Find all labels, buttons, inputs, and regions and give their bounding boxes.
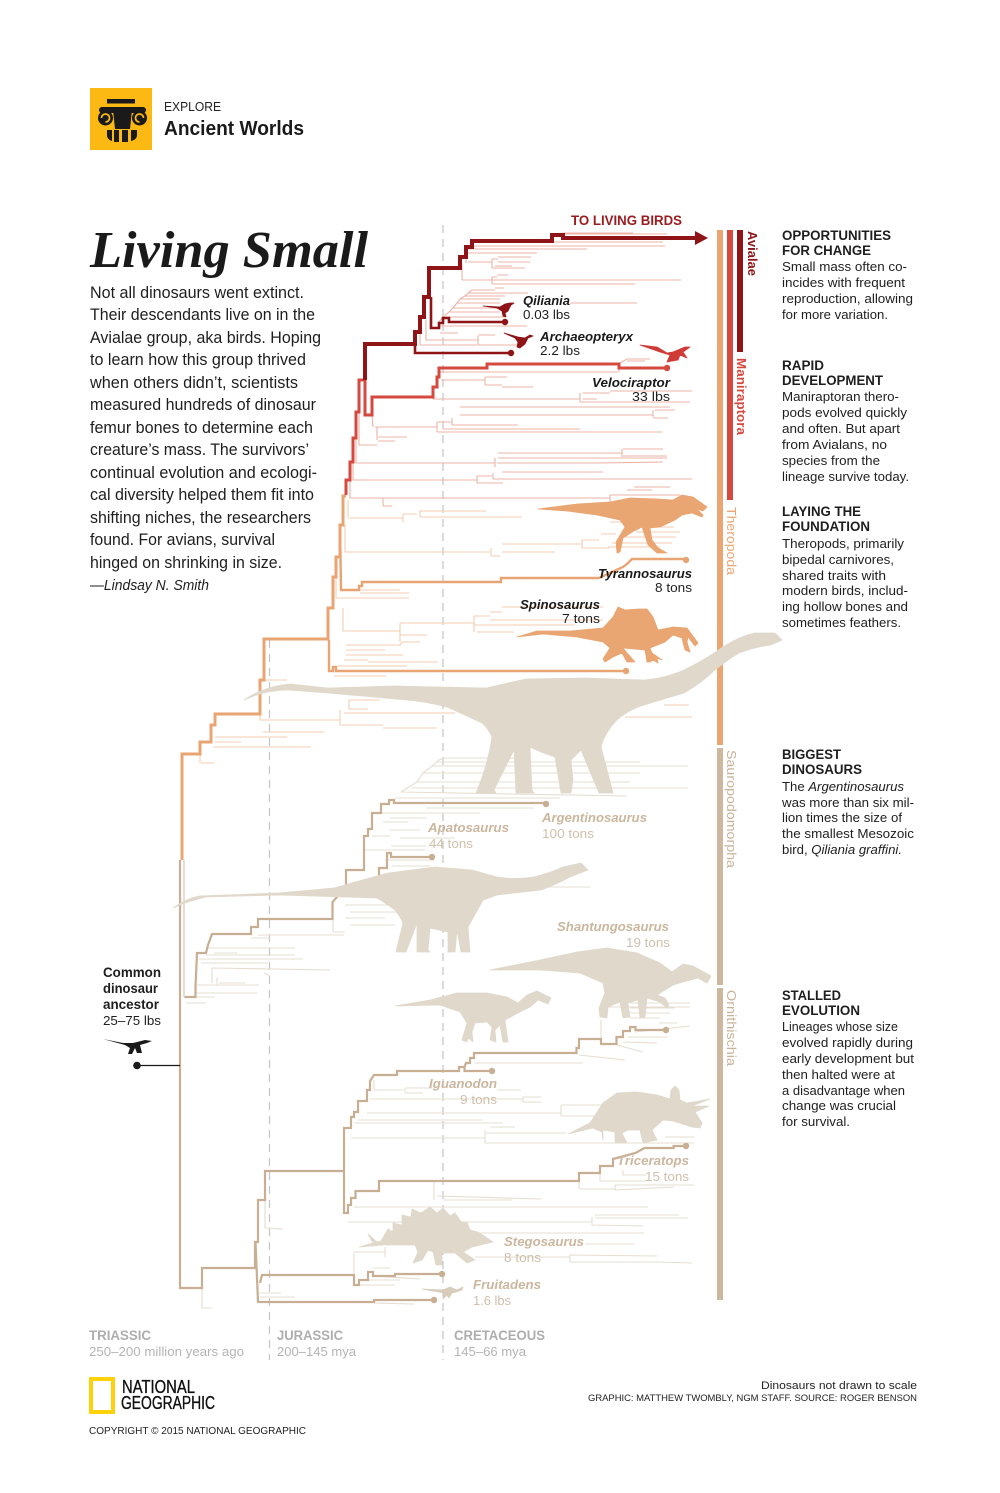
annotation: stalled evolution: evolved rapidly during — [782, 1035, 913, 1050]
lineage end dots — [429, 319, 689, 1303]
credits — [588, 1380, 917, 1404]
species labels: tan section: 9 tons — [460, 1092, 498, 1107]
intro text block: cal diversity helped them fit into — [90, 486, 314, 504]
silhouette: Shantungosaurus — [490, 948, 711, 1018]
callout: common dinosaur ancestor: 25–75 lbs — [103, 1013, 162, 1028]
period labels: 250–200 million years ago — [89, 1344, 244, 1359]
annotation: rapid development — [782, 358, 909, 484]
species labels: coloured section: Velociraptor — [592, 375, 671, 390]
intro text block: when others didn’t, scientists — [89, 374, 298, 392]
annotation: opportunities for change: incides with frequent — [782, 275, 905, 290]
intro text block: measured hundreds of dinosaur — [90, 396, 316, 414]
annotation: stalled evolution: EVOLUTION — [782, 1003, 860, 1018]
annotation: stalled evolution: then halted were at — [782, 1067, 895, 1082]
period dividers — [270, 225, 443, 1360]
annotation: stalled evolution: Lineages whose size — [782, 1019, 898, 1034]
sauropodomorph lineages — [184, 800, 545, 997]
maniraptoran lineages — [346, 364, 665, 495]
period labels: TRIASSIC — [89, 1328, 151, 1343]
species labels: tan section: Apatosaurus — [427, 820, 509, 835]
annotation: laying the foundation — [782, 504, 908, 630]
silhouette: Tyrannosaurus — [538, 495, 707, 553]
species labels: tan section: 19 tons — [626, 935, 671, 950]
clade bars and labels: Maniraptora — [734, 358, 749, 436]
silhouette: Stegosaurus — [359, 1207, 493, 1265]
species labels: tan section: 8 tons — [504, 1250, 542, 1265]
annotation: stalled evolution — [782, 988, 914, 1129]
annotation: opportunities for change: OPPORTUNITIES — [782, 228, 891, 243]
annotation: opportunities for change — [782, 228, 913, 322]
ornithischian lineages — [180, 860, 686, 1302]
annotation: opportunities for change: FOR CHANGE — [782, 243, 871, 258]
title: Living Small — [89, 222, 369, 279]
species labels: coloured section: 0.03 lbs — [523, 307, 571, 322]
clade bars and labels: Sauropodomorpha — [724, 750, 739, 869]
intro text block: Their descendants live on in the — [90, 306, 315, 324]
annotation: biggest dinosaurs: bird, Qiliania graffini. — [782, 842, 902, 857]
species labels: coloured section: 33 lbs — [632, 389, 671, 404]
silhouette: Archaeopteryx — [504, 333, 533, 348]
species labels: coloured section — [520, 293, 693, 626]
National Geographic logo: GEOGRAPHIC — [121, 1393, 215, 1413]
silhouette: Qiliania — [483, 303, 514, 317]
annotation: rapid development: pods evolved quickly — [782, 405, 908, 420]
intro text block: continual evolution and ecologi- — [90, 464, 317, 482]
copyright: COPYRIGHT © 2015 NATIONAL GEOGRAPHIC — [89, 1425, 306, 1437]
annotation: laying the foundation: FOUNDATION — [782, 519, 870, 534]
annotation: biggest dinosaurs: the smallest Mesozoic — [782, 826, 915, 841]
intro text block: Avialae group, aka birds. Hoping — [90, 329, 321, 347]
annotation: stalled evolution: for survival. — [782, 1114, 850, 1129]
intro text block — [89, 284, 321, 594]
National Geographic logo — [91, 1377, 215, 1413]
annotation: opportunities for change: reproduction, allowing — [782, 291, 913, 306]
label: to living birds: TO LIVING BIRDS — [571, 213, 682, 228]
light ornithischian branches — [202, 1003, 694, 1308]
annotation: opportunities for change: for more variation. — [782, 307, 888, 322]
intro text block: —Lindsay N. Smith — [89, 578, 209, 594]
species labels: coloured section: Spinosaurus — [520, 597, 600, 612]
intro text block: shifting niches, the researchers — [90, 509, 311, 527]
series badge: Explore Ancient Worlds: EXPLORE — [164, 100, 221, 114]
silhouette: Fruitadens — [422, 1287, 463, 1299]
National Geographic logo: NATIONAL — [122, 1377, 195, 1397]
species labels: tan section: 15 tons — [645, 1169, 690, 1184]
annotation: stalled evolution: a disadvantage when — [782, 1083, 905, 1098]
phylogenetic tree: bold lineages — [180, 235, 697, 1302]
annotation: rapid development: Maniraptoran thero- — [782, 389, 899, 404]
annotation: rapid development: and often. But apart — [782, 421, 900, 436]
callout: common dinosaur ancestor — [103, 965, 180, 1069]
period labels: 145–66 mya — [454, 1344, 527, 1359]
light sauropod branches — [186, 758, 688, 1003]
callout: common dinosaur ancestor: Common — [103, 965, 161, 980]
species labels: tan section — [427, 810, 690, 1308]
annotation: biggest dinosaurs: The Argentinosaurus — [782, 779, 905, 794]
callout: common dinosaur ancestor: ancestor — [103, 997, 160, 1012]
series badge: Explore Ancient Worlds: Ancient Worlds — [164, 118, 304, 140]
annotation: stalled evolution: early development but — [782, 1051, 914, 1066]
annotation: rapid development: from Avialans, no — [782, 437, 887, 452]
annotation: opportunities for change: Small mass often co- — [782, 259, 907, 274]
intro text block: hinged on shrinking in size. — [90, 554, 282, 572]
annotation: biggest dinosaurs: BIGGEST — [782, 747, 842, 762]
credits: GRAPHIC: MATTHEW TWOMBLY, NGM STAFF. SOURCE: ROGER BENSON — [588, 1393, 917, 1404]
clade bars and labels: Ornithischia — [724, 990, 739, 1067]
annotation: laying the foundation: ing hollow bones and — [782, 599, 908, 614]
annotation: rapid development: RAPID — [782, 358, 824, 373]
species labels: tan section: Triceratops — [617, 1153, 689, 1168]
annotation: laying the foundation: bipedal carnivores, — [782, 552, 894, 567]
clade bars and labels: Avialae — [745, 231, 760, 276]
period labels: JURASSIC — [277, 1328, 343, 1343]
species labels: tan section: Argentinosaurus — [541, 810, 647, 825]
light avialae and maniraptoran branches — [350, 233, 692, 506]
annotation: stalled evolution: change was crucial — [782, 1098, 896, 1113]
annotation: laying the foundation: LAYING THE — [782, 504, 861, 519]
annotation: biggest dinosaurs: DINOSAURS — [782, 762, 862, 777]
annotation: laying the foundation: Theropods, primarily — [782, 536, 904, 551]
species labels: coloured section: Tyrannosaurus — [598, 566, 692, 581]
phylogenetic tree: light branches — [186, 233, 694, 1308]
series badge: Explore Ancient Worlds — [90, 88, 304, 150]
species labels: tan section: Shantungosaurus — [557, 919, 669, 934]
credits: Dinosaurs not drawn to scale — [761, 1380, 917, 1392]
species labels: tan section: Iguanodon — [429, 1076, 497, 1091]
silhouette: Iguanodon — [395, 991, 551, 1042]
silhouette: Spinosaurus — [517, 607, 698, 663]
annotation: rapid development: lineage survive today. — [782, 469, 909, 484]
intro text block: to learn how this group thrived — [90, 351, 306, 369]
species labels: tan section: Fruitadens — [473, 1277, 541, 1292]
intro text block: found. For avians, survival — [90, 531, 275, 549]
light theropod branches — [200, 500, 692, 763]
annotation: biggest dinosaurs — [781, 747, 915, 857]
callout: common dinosaur ancestor: dinosaur — [103, 981, 159, 996]
period labels — [89, 1328, 545, 1359]
annotation: laying the foundation: sometimes feathers. — [782, 615, 901, 630]
silhouette: Triceratops — [568, 1086, 710, 1143]
intro text block: Not all dinosaurs went extinct. — [90, 284, 304, 302]
clade bars and labels — [717, 230, 760, 1300]
silhouette: Apatosaurus — [173, 863, 588, 952]
species labels: tan section: 1.6 lbs — [473, 1293, 511, 1308]
clade bars and labels: Theropoda — [724, 507, 739, 576]
intro text block: femur bones to determine each — [90, 419, 313, 437]
species labels: tan section: Stegosaurus — [504, 1234, 584, 1249]
period labels: 200–145 mya — [277, 1344, 357, 1359]
species labels: coloured section: Qiliania — [523, 293, 570, 308]
species labels: coloured section: Archaeopteryx — [539, 329, 634, 344]
species labels: tan section: 44 tons — [429, 836, 474, 851]
theropod lineages — [182, 496, 346, 860]
period labels: CRETACEOUS — [454, 1328, 545, 1343]
avialan lineages — [365, 235, 697, 380]
species labels: tan section: 100 tons — [542, 826, 595, 841]
annotation: biggest dinosaurs: lion times the size of — [782, 810, 902, 825]
annotation: laying the foundation: shared traits with — [782, 568, 886, 583]
annotation: laying the foundation: modern birds, includ- — [782, 583, 908, 598]
species labels: coloured section: 8 tons — [655, 580, 693, 595]
annotation: biggest dinosaurs: was more than six mil- — [781, 795, 914, 810]
annotation: rapid development: DEVELOPMENT — [782, 373, 884, 388]
silhouette: Velociraptor — [640, 345, 690, 362]
annotation: rapid development: species from the — [782, 453, 880, 468]
intro text block: creature’s mass. The survivors’ — [90, 441, 309, 459]
arrow: to living birds — [695, 231, 708, 245]
species labels: coloured section: 7 tons — [562, 611, 601, 626]
silhouette: Argentinosaurus — [244, 633, 782, 793]
species labels: coloured section: 2.2 lbs — [540, 343, 581, 358]
annotation: stalled evolution: STALLED — [782, 988, 841, 1003]
